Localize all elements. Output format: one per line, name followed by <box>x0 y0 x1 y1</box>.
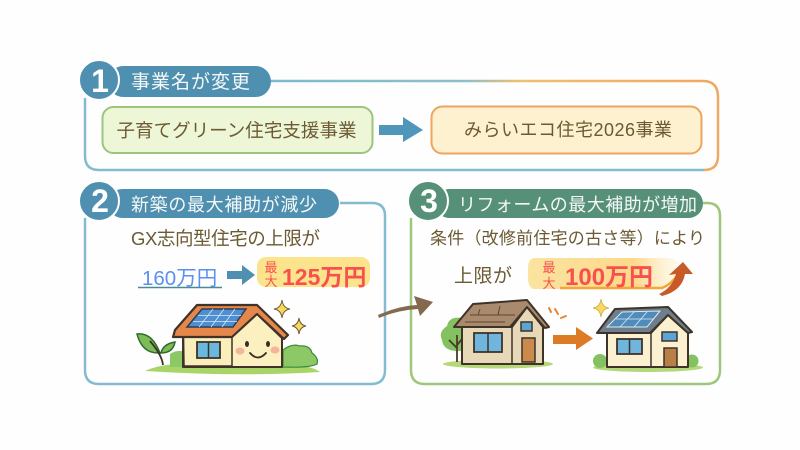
heading pill 1 <box>108 66 271 97</box>
small window <box>662 332 677 341</box>
highlight amount 3: 最 <box>542 260 556 275</box>
solar panel <box>187 309 246 327</box>
panel 1 outline <box>85 81 718 170</box>
sparkles <box>274 300 306 334</box>
illustration: old house <box>441 300 553 368</box>
body <box>462 307 543 364</box>
face <box>236 341 280 358</box>
accent ticks <box>549 308 566 318</box>
number badge 2: 2 <box>91 183 109 219</box>
sparkle <box>593 299 609 317</box>
panel 2 outline <box>85 203 385 384</box>
GX text: GX志向型住宅の上限が <box>131 228 320 249</box>
heading pill 1: 事業名が変更 <box>131 71 250 93</box>
panel: 1 事業名が変更 <box>79 60 718 170</box>
heading pill 3: リフォームの最大補助が増加 <box>458 195 697 215</box>
highlight amount 3: 大 <box>542 276 556 291</box>
arrow: rename <box>379 117 423 142</box>
arrow: renovation <box>553 327 593 350</box>
bushes <box>283 345 317 367</box>
arrow: increase <box>659 262 693 296</box>
number badge 3 <box>408 181 448 221</box>
limit label: 上限が <box>454 265 512 287</box>
panel: 2 新築 <box>79 181 385 384</box>
illustration: smiling solar house <box>137 300 320 374</box>
panel 3 outline <box>411 203 720 384</box>
old name box <box>102 107 372 153</box>
big window <box>617 339 642 354</box>
illustration: renovated house <box>593 299 703 372</box>
new name box: みらいエコ住宅2026事業 <box>464 120 672 140</box>
heading pill 2: 新築の最大補助が減少 <box>131 195 317 215</box>
tree <box>441 318 463 362</box>
window <box>197 342 220 358</box>
roof <box>454 300 549 328</box>
highlight amount: 大 <box>264 274 278 289</box>
condition text: 条件（改修前住宅の古さ等）により <box>430 229 705 248</box>
roof <box>597 307 692 333</box>
number badge 1 <box>79 60 119 100</box>
grass <box>145 364 320 374</box>
arrow: decrease <box>227 265 255 285</box>
panel: 3 リフォーム <box>408 181 720 384</box>
door <box>522 338 535 362</box>
body <box>607 315 688 367</box>
bushes <box>593 354 607 368</box>
highlight amount: 125万円 <box>282 264 366 290</box>
house body <box>183 314 282 367</box>
highlight amount 3 <box>528 258 680 291</box>
small window <box>521 322 532 331</box>
highlight amount: 最 <box>264 260 278 275</box>
big window <box>474 333 502 352</box>
heading pill 2 <box>108 189 339 218</box>
plant <box>137 334 175 365</box>
highlight amount 3: 100万円 <box>565 264 653 291</box>
solar panel <box>607 311 660 327</box>
old amount: 160万円 <box>142 267 217 290</box>
number badge 3: 3 <box>420 183 438 219</box>
roof <box>173 305 288 339</box>
arrow: panel 2 to 3 <box>378 296 433 318</box>
highlight amount <box>257 257 370 290</box>
number badge 2 <box>79 181 119 221</box>
heading pill 3 <box>435 189 703 218</box>
old name box: 子育てグリーン住宅支援事業 <box>116 120 356 141</box>
door <box>664 348 677 367</box>
grass <box>593 363 703 372</box>
grass <box>443 360 553 368</box>
number badge 1: 1 <box>91 63 109 99</box>
new name box <box>432 106 702 154</box>
